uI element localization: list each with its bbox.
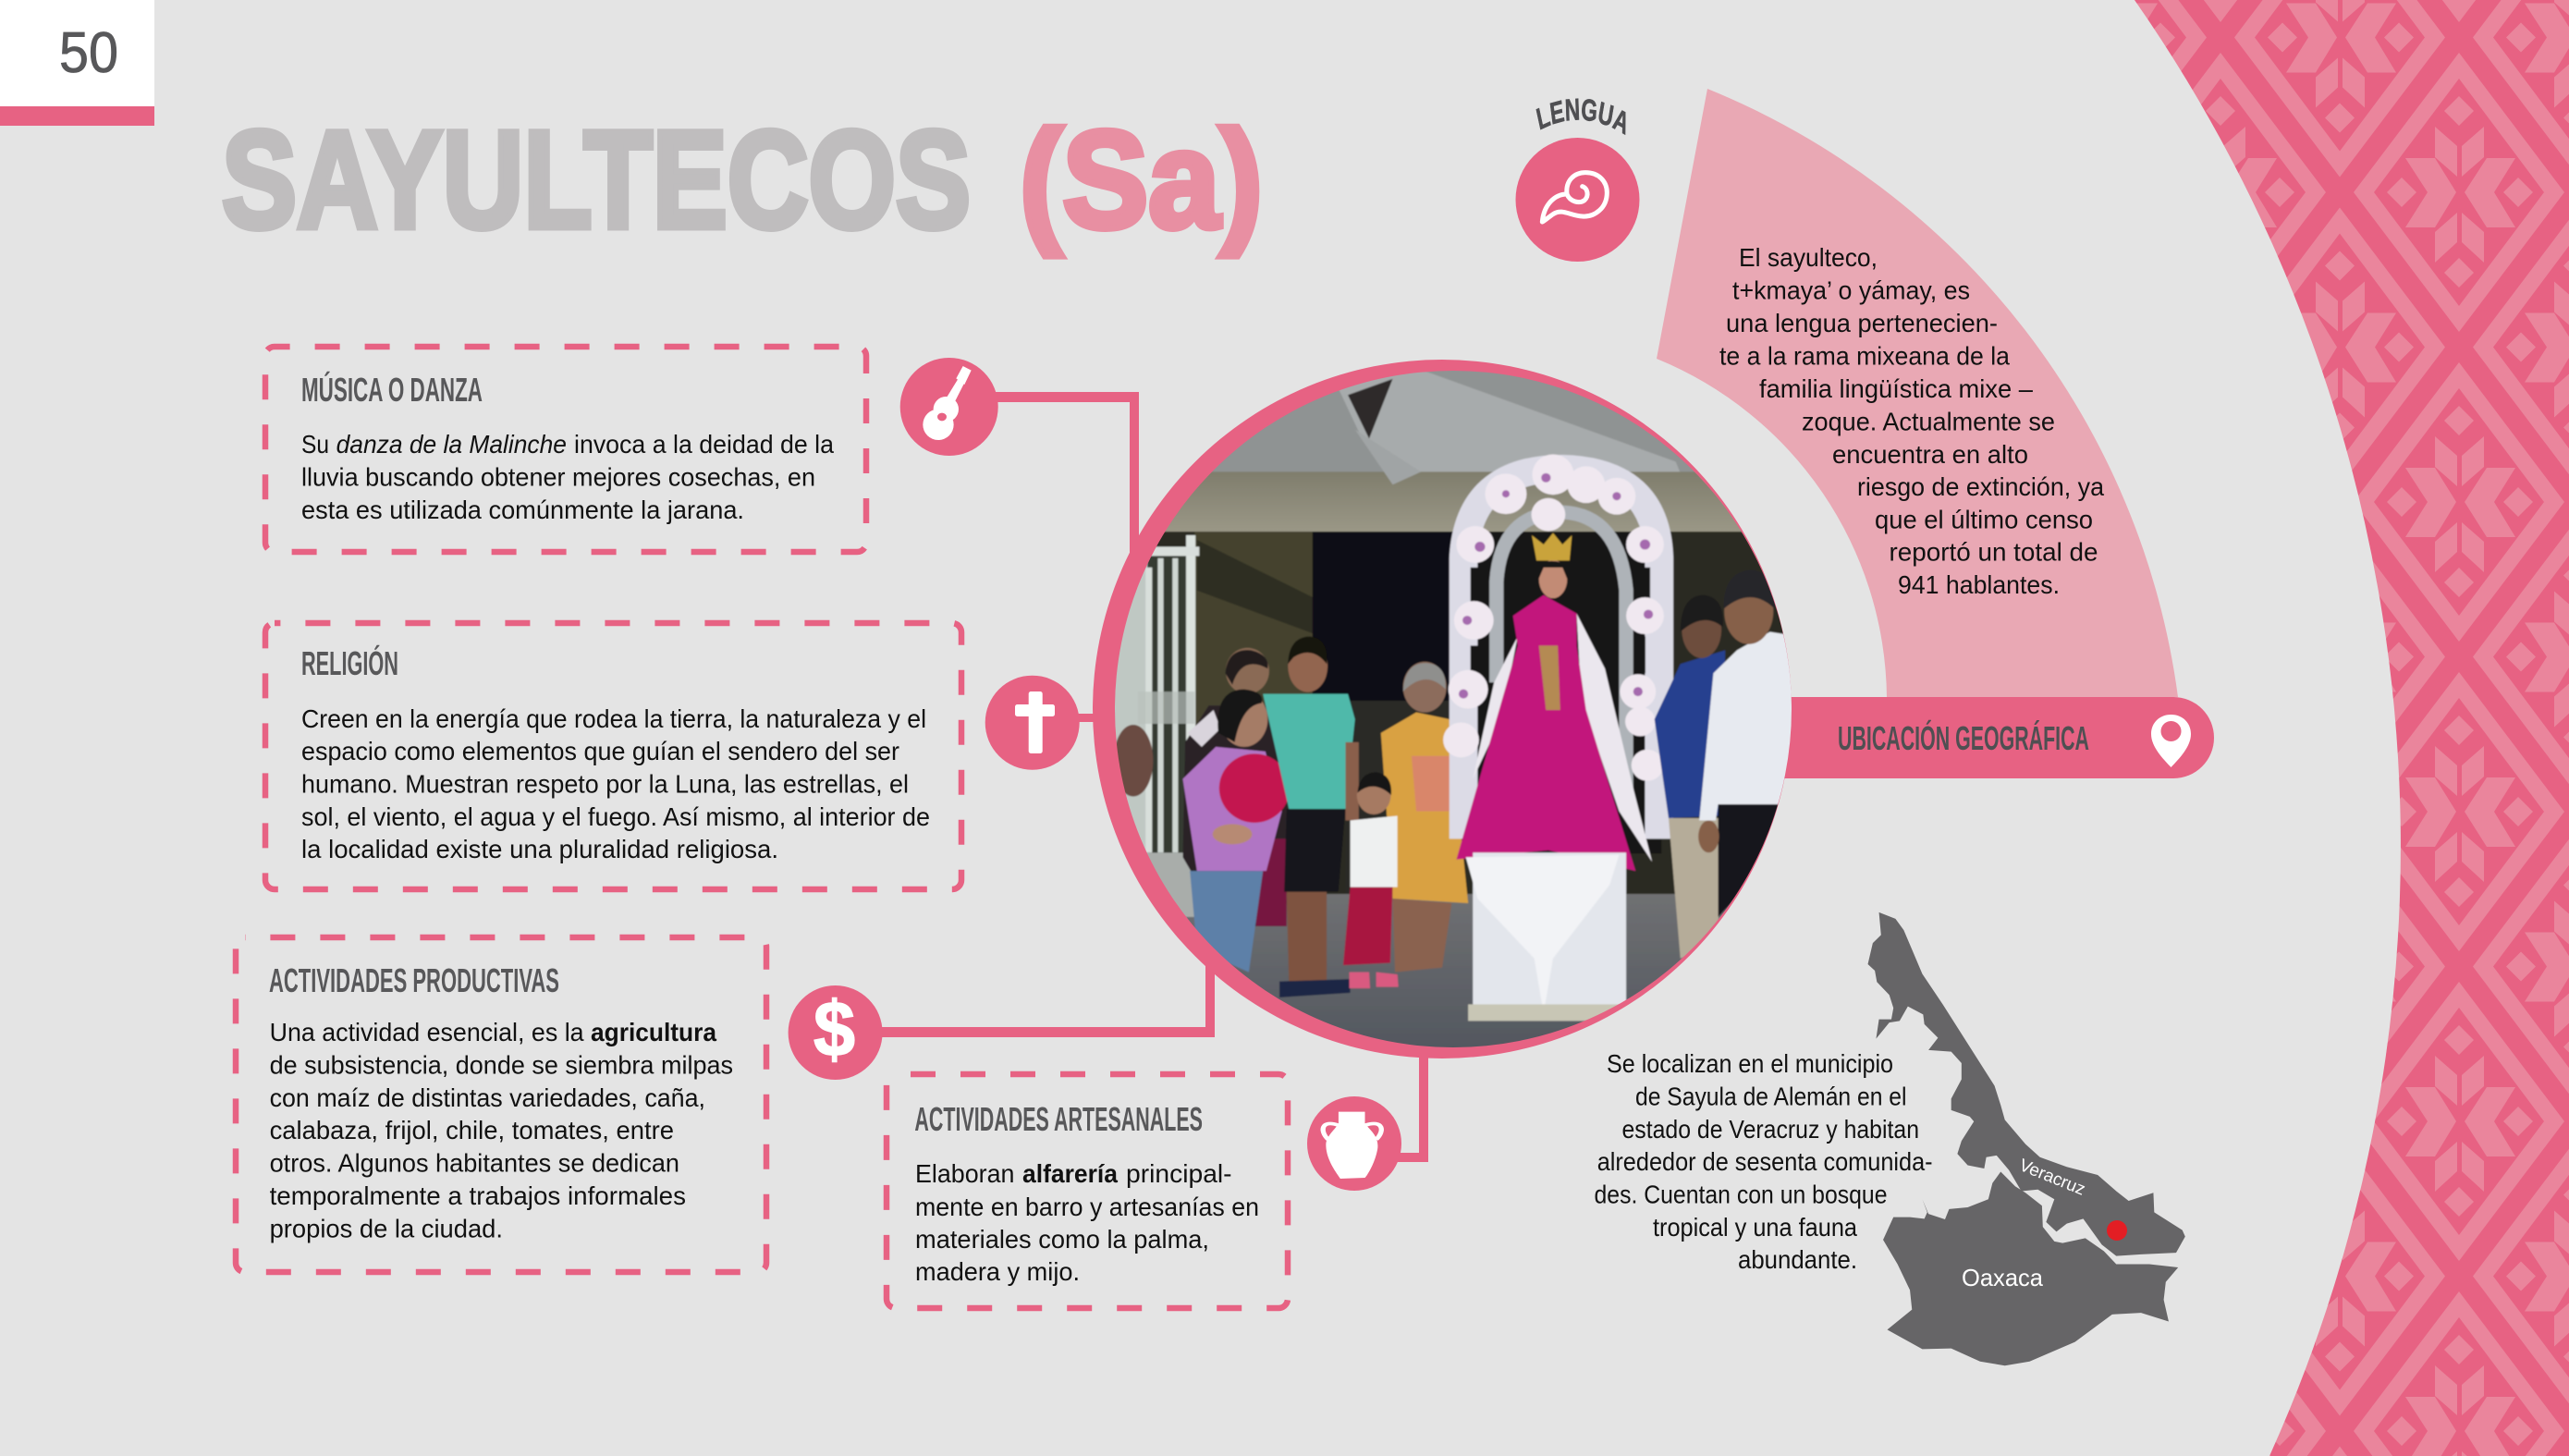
title: (Sa) — [1020, 102, 1263, 257]
ceiling — [1211, 371, 1695, 473]
text: artesanales description: madera y mijo. — [915, 1257, 1080, 1286]
text: religión description: la localidad existe una pluralidad religiosa. — [301, 835, 778, 863]
text: artesanales description: alfarería — [1022, 1159, 1119, 1188]
man in blue — [1669, 818, 1720, 959]
heading: ubicación geográfica: UBICACIÓN GEOGRÁFICA — [1838, 718, 2089, 757]
text: música description: invoca a la deidad de la — [574, 430, 835, 459]
text: ubicación description — [1594, 1049, 1933, 1274]
text: ubicación description: alrededor de sesenta comunida- — [1597, 1147, 1933, 1176]
photo ring — [1093, 360, 1792, 1058]
pill: ubicación geográfica — [1756, 697, 2214, 778]
heading: música o danza: MÚSICA O DANZA — [301, 370, 483, 409]
text: lengua description: 941 hablantes. — [1898, 570, 2060, 599]
heading: actividades productivas: ACTIVIDADES PRODUCTIVAS — [269, 961, 559, 999]
heading: religión: RELIGIÓN — [301, 643, 398, 682]
icon: lengua speech swirl — [1516, 138, 1640, 262]
man in white — [1719, 804, 1781, 917]
text: religión description: humano. Muestran respeto por la Luna, las estrellas, el — [301, 769, 909, 799]
text: lengua description: que el último censo — [1875, 505, 2093, 534]
text: productivas description: propios de la ciudad. — [270, 1215, 503, 1242]
text: música description: lluvia buscando obtener mejores cosechas, en — [301, 462, 815, 492]
map: Veracruz and Oaxaca — [1868, 912, 2185, 1365]
woman in teal — [1287, 892, 1327, 982]
map label: Veracruz: Veracruz — [2016, 1156, 2088, 1200]
page number tab — [0, 0, 154, 126]
map marker: Sayula — [2107, 1220, 2127, 1241]
icon: dollar sign — [789, 985, 883, 1080]
title: SAYULTECOS — [222, 102, 971, 257]
text: lengua description: El sayulteco, — [1739, 243, 1878, 272]
text: lengua description: reportó un total de — [1890, 538, 2098, 566]
text: productivas description: calabaza, frijol, chile, tomates, entre — [270, 1116, 674, 1144]
icon: clay pot — [1307, 1096, 1401, 1191]
panel: música o danza — [265, 347, 866, 552]
text: ubicación description: Se localizan en el municipio — [1607, 1049, 1893, 1078]
text: lengua description: t+kmaya’ o yámay, es — [1732, 275, 1970, 305]
text: lengua description: riesgo de extinción, ya — [1857, 472, 2105, 501]
map region: Oaxaca — [1883, 1171, 2178, 1365]
text: música description: Su — [301, 430, 329, 459]
text: música description: esta es utilizada comúnmente la jarana. — [301, 496, 744, 524]
woman behind — [1182, 705, 1287, 926]
text: productivas description: otros. Algunos habitantes se dedican — [270, 1148, 679, 1178]
text: productivas description: temporalmente a trabajos informales — [270, 1181, 686, 1210]
text: ubicación description: abundante. — [1738, 1245, 1857, 1274]
text: productivas description: con maíz de distintas variedades, caña, — [270, 1083, 705, 1112]
text: lengua description: zoque. Actualmente se — [1802, 407, 2055, 436]
text: lengua description: encuentra en alto — [1832, 440, 2028, 469]
old woman — [1393, 899, 1451, 973]
text: ubicación description: des. Cuentan con un bosque — [1594, 1180, 1888, 1209]
photo: procession statue and family, drawn as shapes — [1115, 371, 1792, 1047]
statue figure — [1577, 614, 1652, 862]
text: lengua description: familia lingüística mixe – — [1759, 374, 2034, 403]
page number tab: 50 — [59, 21, 118, 85]
text: lengua description — [1719, 243, 2105, 599]
text: ubicación description: estado de Veracruz y habitan — [1621, 1115, 1919, 1144]
connector lines — [860, 392, 1428, 1162]
text: lengua description: una lengua pertenecien- — [1726, 309, 1998, 337]
map label: Oaxaca: Oaxaca — [1962, 1264, 2044, 1291]
heading: actividades artesanales: ACTIVIDADES ARTESANALES — [914, 1100, 1203, 1138]
panel: religión — [265, 623, 961, 889]
text: artesanales description — [915, 1159, 1259, 1286]
text: religión description: espacio como elementos que guían el sendero del ser — [301, 737, 899, 765]
text: ubicación description: de Sayula de Alemán en el — [1635, 1082, 1906, 1111]
panel: actividades artesanales — [887, 1074, 1288, 1308]
text: religión description: sol, el viento, el agua y el fuego. Así mismo, al interior de — [301, 802, 930, 831]
text: artesanales description: materiales como la palma, — [915, 1225, 1209, 1254]
icon: dollar sign: $ — [814, 985, 855, 1072]
panel: actividades productivas — [236, 937, 766, 1272]
woven textile pattern band — [2126, 0, 2569, 1456]
text: música description: danza de la Malinche — [336, 430, 567, 459]
gate — [1115, 562, 1148, 851]
text: religión description — [301, 704, 930, 863]
text: productivas description — [270, 1018, 733, 1242]
map region: Veracruz — [1868, 912, 2185, 1256]
text: artesanales description: principal- — [1126, 1159, 1232, 1188]
text: artesanales description: mente en barro y artesanías en — [915, 1193, 1259, 1221]
icon: cross — [985, 676, 1080, 770]
panel: lengua wedge — [1657, 89, 2178, 697]
text: lengua description: te a la rama mixeana de la — [1719, 342, 2011, 370]
text: productivas description: de subsistencia, donde se siembra milpas — [270, 1050, 733, 1080]
child — [1343, 887, 1393, 965]
interior — [1194, 532, 1317, 725]
icon: location pin — [2151, 715, 2191, 767]
text: productivas description: Una actividad esencial, es la — [270, 1018, 584, 1046]
text: música description — [301, 430, 835, 524]
lengua heading on arc: LENGUA — [1536, 98, 1625, 135]
curved background edge — [2034, 0, 2401, 1456]
statue arch — [1463, 469, 1659, 838]
text: religión description: Creen en la energía que rodea la tierra, la naturaleza y el — [301, 704, 926, 733]
text: artesanales description: Elaboran — [915, 1159, 1015, 1188]
statue base — [1473, 852, 1626, 1004]
text: productivas description: agricultura — [591, 1018, 717, 1046]
girl — [1182, 747, 1282, 871]
text: ubicación description: tropical y una fauna — [1653, 1213, 1858, 1242]
floor — [1186, 893, 1732, 1047]
icon: guitar — [900, 358, 998, 456]
